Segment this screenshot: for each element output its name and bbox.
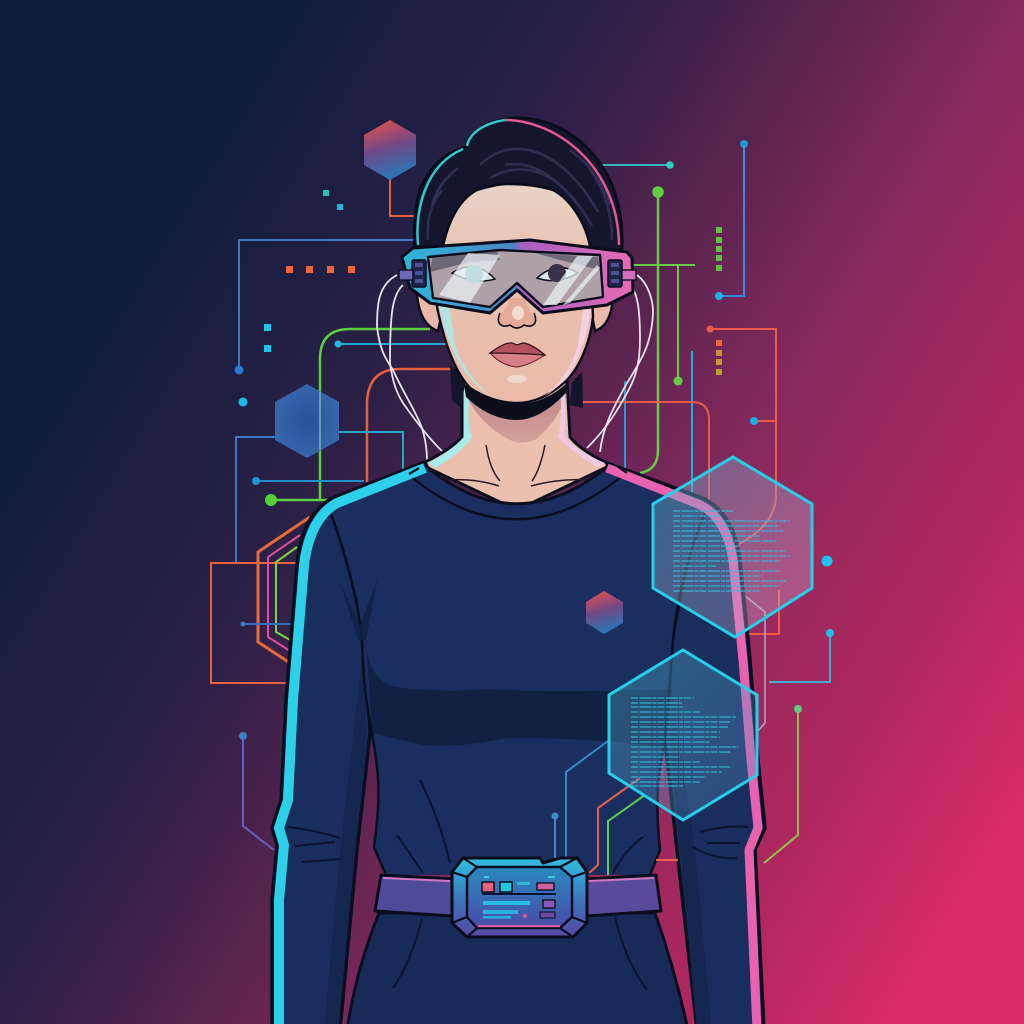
collar band — [428, 467, 607, 504]
chest shadow band — [366, 640, 672, 748]
neck lines — [445, 445, 590, 486]
temple modules — [412, 260, 426, 287]
ears — [417, 295, 613, 331]
figure body — [272, 380, 765, 1024]
goggles — [399, 240, 636, 313]
goggles frame — [402, 240, 633, 313]
chin shadow band — [464, 382, 568, 420]
circuit network: left side — [211, 175, 452, 850]
skirt — [347, 913, 688, 1024]
belt device — [452, 858, 587, 937]
glass panel: upper hexagon — [653, 457, 812, 637]
pink sleeve stripe — [607, 468, 758, 1024]
neck light edge left — [428, 385, 472, 468]
glass panel: lower hexagon — [609, 650, 757, 820]
nose highlight — [512, 306, 524, 320]
dots and squares: right — [644, 227, 832, 566]
lips — [490, 343, 545, 367]
lens — [428, 250, 603, 307]
collar stripe ticks — [409, 466, 627, 474]
face light edge right — [545, 305, 591, 396]
hair wisps near neck — [450, 365, 583, 408]
left eye — [452, 267, 495, 281]
circuit network: right side — [575, 140, 834, 863]
device controls — [482, 882, 494, 892]
hexagon: blue — [275, 384, 339, 458]
nostril outline — [498, 313, 536, 328]
nose — [498, 298, 536, 328]
green line over blue hexagon — [319, 392, 321, 450]
soft folds at armpits — [340, 578, 378, 640]
hair highlights — [467, 120, 505, 146]
head — [414, 118, 622, 420]
neck — [425, 380, 607, 510]
belt — [375, 858, 661, 937]
upper lip — [490, 343, 545, 355]
left arm — [272, 462, 425, 1024]
brow shadow under lens — [430, 251, 600, 272]
hexagon: orange to blue top — [364, 120, 416, 180]
elbow and waist fold lines — [288, 780, 748, 990]
torso — [327, 467, 700, 875]
right arm — [607, 463, 765, 1024]
chest hexagon emblem — [586, 591, 623, 634]
hair strands — [428, 149, 612, 240]
connector right — [622, 270, 636, 280]
face — [437, 184, 593, 403]
arm inner shading — [324, 660, 712, 1024]
connector left — [399, 270, 413, 280]
lower circuit lines over torso — [552, 741, 678, 875]
shoulder and arm seams — [327, 503, 707, 875]
text block lines upper — [673, 511, 790, 591]
lens reflections — [439, 253, 600, 305]
hair — [414, 118, 622, 252]
cable wires — [377, 275, 653, 462]
module keys — [415, 265, 619, 281]
neck shadow — [466, 395, 567, 442]
belt highlights — [383, 878, 654, 881]
chin highlight — [507, 375, 527, 383]
face light edge left — [439, 305, 490, 395]
dots and squares: left — [238, 190, 355, 406]
neck light edge right — [558, 385, 605, 467]
cyan sleeve stripe — [279, 468, 425, 1024]
right eye — [537, 268, 578, 281]
device screen — [467, 867, 572, 928]
text block lines lower — [631, 698, 738, 786]
belt strap right — [586, 875, 661, 916]
device facets — [452, 858, 587, 937]
belt strap left — [375, 875, 452, 916]
